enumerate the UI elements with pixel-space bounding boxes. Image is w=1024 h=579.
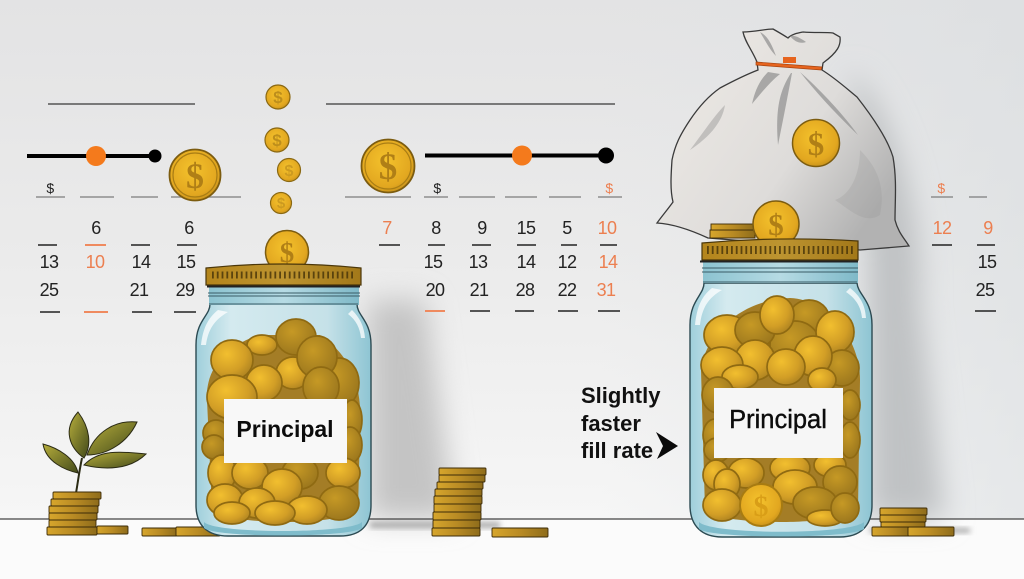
- jar highlights: [695, 288, 866, 325]
- middle calendar: 15: [517, 218, 536, 238]
- jar body: [690, 283, 872, 537]
- middle calendar: 31: [597, 280, 616, 300]
- label: Principal: [224, 399, 347, 463]
- coin: middle large: [362, 140, 414, 192]
- plant: [43, 412, 146, 493]
- middle calendar: [326, 104, 622, 311]
- label: Principal: [714, 388, 843, 458]
- coins inside: [202, 319, 362, 525]
- middle calendar: 28: [516, 280, 535, 300]
- coin: left large: [170, 150, 220, 200]
- left calendar: 15: [177, 252, 196, 272]
- jar neck: [208, 287, 360, 305]
- jar lid: [700, 239, 858, 262]
- right calendar: [931, 180, 997, 311]
- middle calendar: 21: [470, 280, 489, 300]
- coin entering left jar: $: [280, 237, 294, 269]
- jar body: [196, 304, 371, 536]
- left calendar: 10: [86, 252, 105, 272]
- left calendar: 14: [132, 252, 151, 272]
- bag tie: [756, 57, 822, 70]
- falling coins: $: [272, 131, 282, 150]
- jar highlights: [201, 310, 365, 345]
- callout: Slightly faster fill rate: faster: [581, 411, 641, 436]
- money bag: [657, 29, 909, 250]
- jar lid: [206, 264, 361, 286]
- middle calendar: 20: [426, 280, 445, 300]
- coin: left large: $: [186, 156, 204, 196]
- callout: Slightly faster fill rate: [581, 383, 678, 463]
- coin entering left jar: [266, 230, 308, 274]
- right calendar: $: [937, 180, 945, 196]
- left jar: [196, 264, 371, 536]
- right jar: [690, 239, 872, 537]
- coin on bag: [792, 120, 840, 166]
- right calendar: 9: [983, 218, 993, 238]
- middle calendar: 15: [424, 252, 443, 272]
- coins on right jar lid: $: [768, 207, 784, 242]
- floor line: [0, 518, 1024, 520]
- callout: Slightly faster fill rate: fill rate: [581, 438, 653, 463]
- coin on bag: $: [808, 127, 824, 163]
- left calendar: 13: [40, 252, 59, 272]
- jar neck: [702, 262, 858, 283]
- left calendar: 21: [130, 280, 149, 300]
- falling coins: $: [277, 195, 286, 212]
- coin stack: under plant: [47, 492, 220, 536]
- left calendar: 25: [40, 280, 59, 300]
- left calendar: $: [46, 180, 54, 196]
- middle calendar: 7: [382, 218, 392, 238]
- slider: middle timeline: [425, 146, 614, 166]
- left calendar: 29: [176, 280, 195, 300]
- middle calendar: $: [605, 180, 613, 196]
- right calendar: 25: [976, 280, 995, 300]
- middle calendar: 12: [558, 252, 577, 272]
- falling coins: $: [273, 88, 283, 107]
- bag folds: [690, 32, 882, 218]
- middle calendar: 14: [517, 252, 536, 272]
- coin in front of right jar: $: [754, 490, 768, 523]
- middle calendar: 22: [558, 280, 577, 300]
- falling coins: $: [285, 163, 294, 180]
- right calendar: 12: [933, 218, 952, 238]
- left calendar: 6: [91, 218, 101, 238]
- coins on right jar lid: [710, 201, 799, 247]
- coin in front of right jar: [740, 484, 782, 526]
- coin stack: right: [872, 508, 954, 536]
- jar and bag shadows: [368, 70, 970, 533]
- left calendar: 6: [184, 218, 194, 238]
- middle calendar: 9: [477, 218, 487, 238]
- right calendar: 15: [978, 252, 997, 272]
- slider: left timeline: [27, 146, 162, 166]
- coin: middle large: $: [379, 147, 397, 188]
- coins inside: [701, 296, 860, 526]
- middle calendar: $: [433, 180, 441, 196]
- arrow: [656, 432, 678, 459]
- coin stack: middle: [432, 468, 548, 537]
- middle calendar: 14: [599, 252, 618, 272]
- middle calendar: 10: [598, 218, 617, 238]
- label: Principal: Principal: [729, 406, 827, 434]
- label: Principal: Principal: [236, 416, 334, 442]
- falling coins: [265, 85, 300, 214]
- middle calendar: 13: [469, 252, 488, 272]
- middle calendar: 8: [431, 218, 441, 238]
- middle calendar: 5: [562, 218, 572, 238]
- left calendar: [27, 104, 241, 312]
- callout: Slightly faster fill rate: Slightly: [581, 383, 661, 408]
